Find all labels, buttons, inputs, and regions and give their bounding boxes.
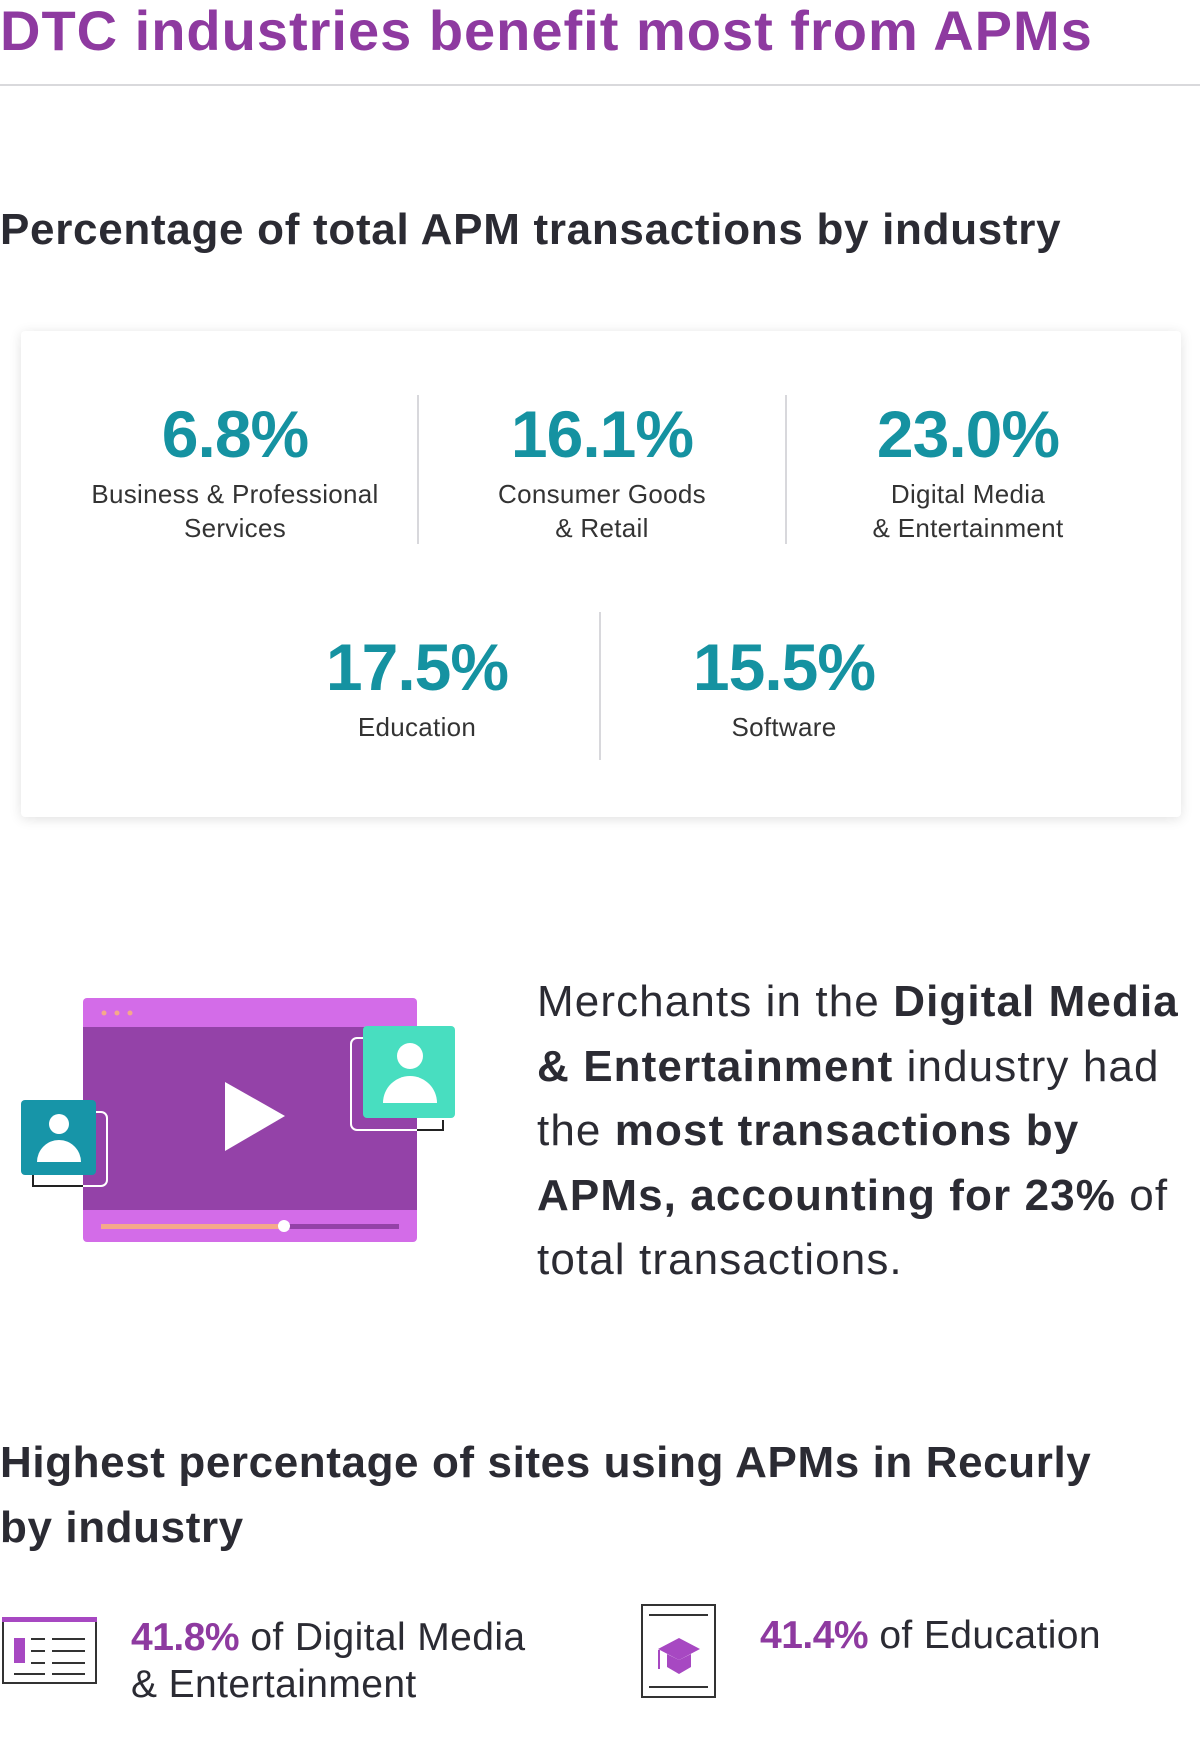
heading: percentage of total APM transactions: Percentage of total APM transactions by industry <box>0 205 1061 254</box>
panel: industry stats card <box>21 331 1181 817</box>
heading: highest percentage of sites: by industry <box>0 1503 244 1552</box>
stat: consumer goods <box>498 397 706 543</box>
stat: business & professional services: Services <box>184 513 286 543</box>
stat: business & professional services <box>91 397 379 543</box>
text block: digital media callout: & Entertainment industry had <box>537 1042 1160 1090</box>
icon: education tablet <box>641 1604 716 1698</box>
heading: highest percentage of sites <box>0 1438 1091 1552</box>
text block: digital media callout: Merchants in the Digital Media <box>537 977 1179 1026</box>
stat: business & professional services: 6.8% <box>162 397 308 471</box>
heading: highest percentage of sites: Highest percentage of sites using APMs in Recurly <box>0 1438 1091 1487</box>
stat: education: Education <box>358 712 476 742</box>
stat: business & professional services: Business & Professional <box>91 479 379 509</box>
text block: digital media callout: APMs, accounting for 23% of <box>537 1170 1168 1220</box>
text block: digital media callout: the most transactions by <box>537 1106 1079 1155</box>
stat: digital media: & Entertainment <box>873 513 1063 543</box>
stat: digital media: 23.0% <box>877 397 1059 471</box>
stat: consumer goods: & Retail <box>555 513 649 543</box>
stat: 41.8% digital media <box>131 1616 526 1706</box>
stat: digital media: Digital Media <box>891 479 1045 509</box>
stat: 41.8% digital media: & Entertainment <box>131 1663 417 1706</box>
stat: software: Software <box>731 712 836 742</box>
stat: digital media <box>873 397 1064 543</box>
stat: education <box>326 630 508 742</box>
text block: digital media callout: total transactions. <box>537 1235 903 1284</box>
stat: consumer goods: 16.1% <box>511 397 693 471</box>
title: DTC industries benefit most from APMs <box>0 0 1093 62</box>
icon: media list <box>2 1617 97 1684</box>
stat: software: 15.5% <box>693 630 875 704</box>
stat: software <box>693 630 875 742</box>
text block: digital media callout <box>537 977 1179 1284</box>
stat: 41.8% digital media: 41.8% of Digital Media <box>131 1616 526 1659</box>
stat: consumer goods: Consumer Goods <box>498 479 706 509</box>
stat: 41.4% education: 41.4% of Education <box>760 1614 1101 1657</box>
illustration: video player with users <box>21 998 455 1242</box>
stat: education: 17.5% <box>326 630 508 704</box>
